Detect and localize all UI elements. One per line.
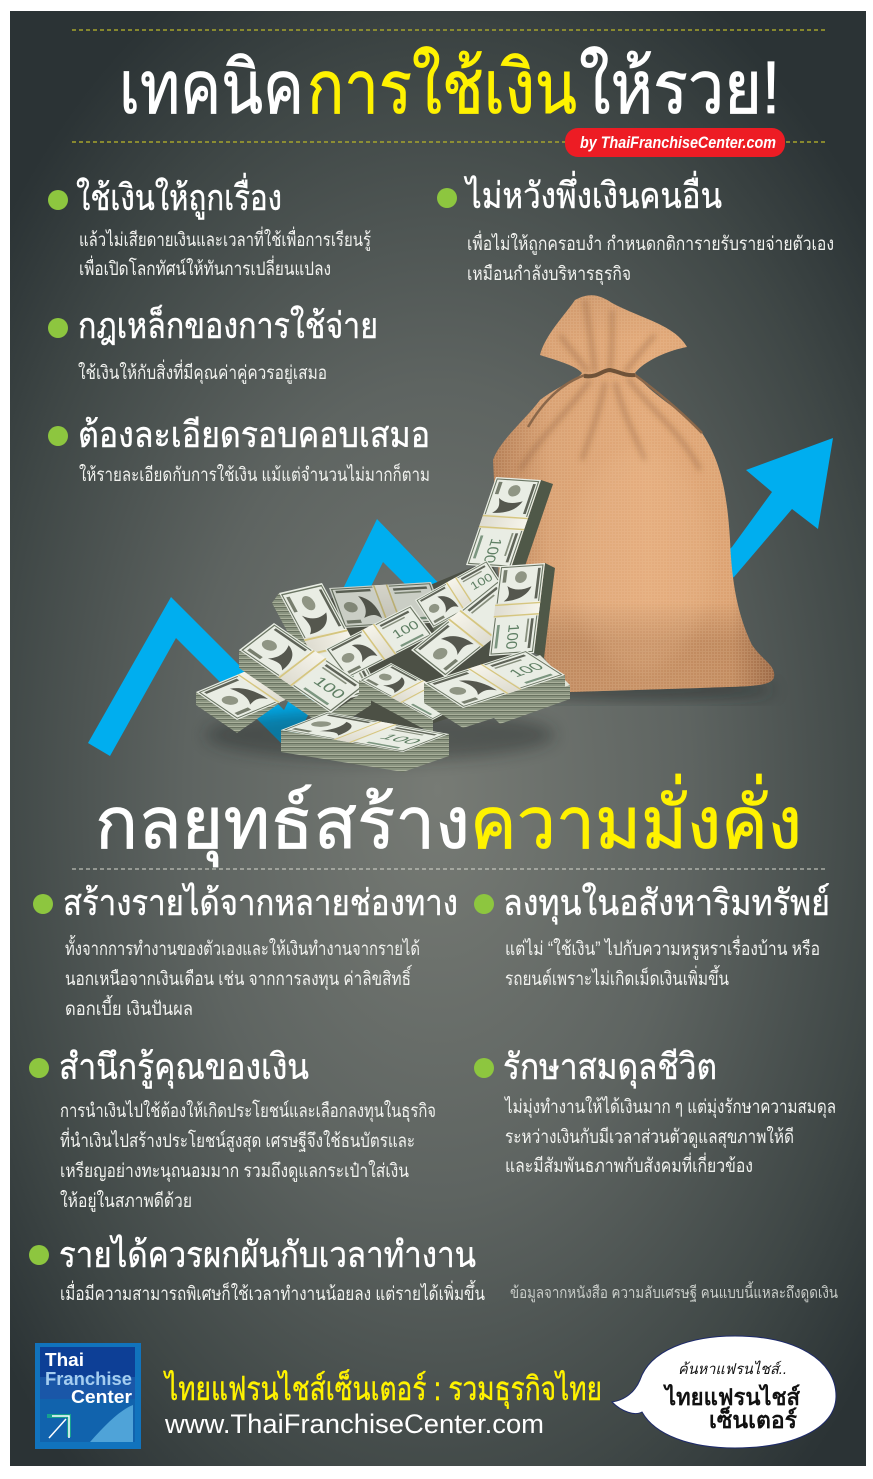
section: tip 4 — [48, 414, 430, 486]
bundle: far left flat — [196, 652, 333, 733]
speech bubble: เซ็นเตอร์ — [709, 1405, 798, 1433]
bundle: centre right diagonal — [411, 580, 532, 677]
bundle: large left with band — [239, 623, 371, 731]
bundle: front: 100 — [374, 733, 426, 746]
section: strategy 3: ให้อยู่ในสภาพดีด้วย — [60, 1190, 192, 1212]
icon: pile of banknote bundles — [196, 477, 570, 772]
arrow: rising blue zigzag — [88, 438, 833, 756]
title — [119, 46, 780, 129]
footer URL: www.ThaiFranchiseCenter.com — [164, 1409, 544, 1439]
dashed rule under heading — [72, 868, 827, 870]
logo: Thai Franchise Center: Franchise — [45, 1369, 132, 1389]
section: tip 2 — [437, 171, 834, 286]
section: strategy 1: สร้างรายได้จากหลายช่องทาง — [63, 882, 458, 923]
section: strategy 5: เมื่อมีความสามารถพิเศษก็ใช้เวลาทำงานน้อยลง แต่รายได้เพิ่มขึ้น — [60, 1280, 485, 1305]
bundle: upright against the sack: 100 — [479, 538, 505, 564]
section: tip 4: ให้รายละเอียดกับการใช้เงิน แม้แต่จำนวนไม่มากก็ตาม — [79, 462, 430, 486]
section: tip 3: กฎเหล็กของการใช้จ่าย — [78, 303, 378, 346]
bundle: centre: 100 — [390, 618, 422, 642]
section: tip 3 — [48, 303, 378, 385]
bundle: centre — [325, 605, 433, 679]
bundle: front — [281, 712, 449, 772]
bundle: top left leaning: 100 — [331, 657, 364, 692]
footer slogan: ไทยแฟรนไชส์เซ็นเตอร์ : รวมธุรกิจไทย — [163, 1369, 602, 1409]
section: strategy 4: และมีสัมพันธภาพกับสังคมที่เกี่ยวข้อง — [505, 1152, 753, 1177]
section: strategy 3: เหรียญอย่างทะนุถนอมมาก รวมถึงดูแลกระเป๋าใส่เงิน — [60, 1160, 409, 1183]
section: strategy 3: ที่นำเงินไปสร้างประโยชน์สูงสุด เศรษฐีจึงใช้ธนบัตรและ — [60, 1127, 415, 1153]
section: strategy 5 — [29, 1234, 485, 1305]
bundle: lower right base — [470, 655, 570, 724]
logo: Thai Franchise Center: Thai — [45, 1350, 84, 1370]
section: tip 4: ต้องละเอียดรอบคอบเสมอ — [78, 414, 430, 455]
bundle: top left leaning — [272, 583, 380, 711]
second dashed rule — [72, 141, 827, 143]
section: strategy 2 — [474, 882, 830, 990]
title: เทคนิค — [119, 46, 304, 129]
logo: Thai Franchise Center — [35, 1343, 141, 1449]
section: tip 3: ใช้เงินให้กับสิ่งที่มีคุณค่าคู่ควรอยู่เสมอ — [78, 359, 327, 385]
heading: strategies — [95, 774, 802, 867]
top dashed rule — [72, 29, 827, 31]
heading: strategies: ความมั่งคั่ง — [470, 774, 802, 864]
bundle: right upright — [489, 563, 555, 658]
bundle: upper right diagonal — [415, 560, 508, 638]
section: strategy 3: การนำเงินไปใช้ต้องให้เกิดประโยชน์และเลือกลงทุนในธุรกิจ — [60, 1099, 436, 1123]
section: strategy 1 — [33, 882, 458, 1020]
icon: money sack — [480, 290, 780, 700]
bundle: back centre — [329, 582, 446, 628]
section: strategy 4 — [474, 1046, 836, 1177]
bundle: lower right — [424, 650, 565, 728]
speech bubble: ค้นหาแฟรนไชส์.. — [678, 1360, 787, 1378]
bundle: upper right diagonal: 100 — [468, 570, 495, 593]
section: tip 1: เพื่อเปิดโลกทัศน์ให้ทันการเปลี่ยนแปลง — [79, 255, 331, 280]
speech bubble: ไทยแฟรนไชส์ — [662, 1383, 801, 1410]
section: tip 2: ไม่หวังพึ่งเงินคนอื่น — [463, 171, 722, 216]
bundle: small centre — [359, 663, 465, 734]
section: strategy 5: รายได้ควรผกผันกับเวลาทำงาน — [59, 1234, 476, 1275]
bundle: upright against the sack — [466, 477, 553, 572]
section: strategy 3 — [29, 1046, 436, 1212]
section: strategy 4: ระหว่างเงินกับมีเวลาส่วนตัวดูแลสุขภาพให้ดี — [505, 1126, 794, 1149]
bundle: right upright: 100 — [502, 623, 522, 650]
section: strategy 2: รถยนต์เพราะไม่เกิดเม็ดเงินเพิ่มขึ้น — [505, 965, 729, 990]
section: strategy 1: ดอกเบี้ย เงินปันผล — [65, 995, 193, 1020]
section: tip 1 — [48, 173, 371, 280]
section: strategy 4: รักษาสมดุลชีวิต — [503, 1046, 717, 1089]
section: tip 2: เหมือนกำลังบริหารธุรกิจ — [467, 264, 631, 286]
bundle: large left with band: 100 — [310, 674, 349, 702]
title: ให้รวย! — [579, 46, 780, 129]
section: tip 1: แล้วไม่เสียดายเงินและเวลาที่ใช้เพื่อการเรียนรู้ — [79, 226, 371, 251]
section: strategy 2: ลงทุนในอสังหาริมทรัพย์ — [503, 882, 830, 925]
section: strategy 1: ทั้งจากการทำงานของตัวเองและให้เงินทำงานจากรายได้ — [65, 935, 420, 960]
section: tip 1: ใช้เงินให้ถูกเรื่อง — [76, 173, 282, 220]
section: strategy 1: นอกเหนือจากเงินเดือน เช่น จากการลงทุน ค่าลิขสิทธิ์ — [65, 964, 413, 991]
title: การใช้เงิน — [307, 46, 577, 129]
heading: strategies: กลยุทธ์สร้าง — [95, 784, 470, 867]
byline pill: by ThaiFranchiseCenter.com — [580, 133, 776, 152]
byline pill — [565, 128, 785, 157]
logo: Thai Franchise Center: Center — [71, 1387, 132, 1407]
bundle: lower right: 100 — [505, 660, 548, 679]
section: strategy 3: สำนึกรู้คุณของเงิน — [59, 1046, 309, 1089]
speech bubble — [612, 1336, 836, 1448]
